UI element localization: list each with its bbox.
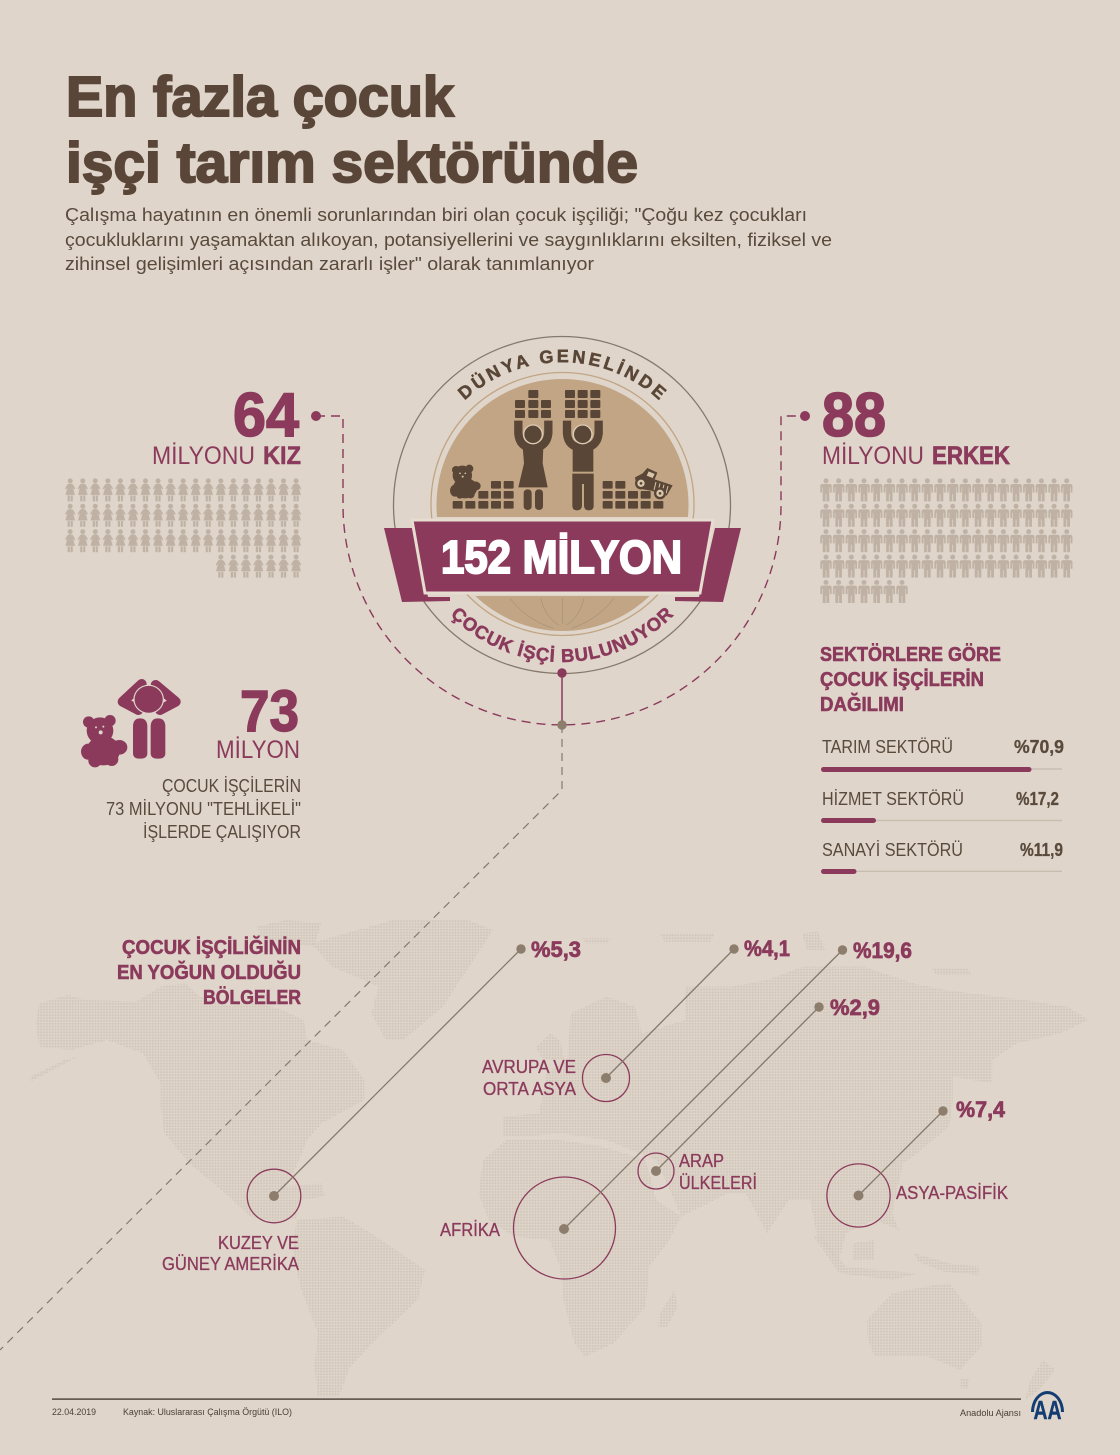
stat: hazardous work: 73 MİLYONU "TEHLİKELİ": [106, 799, 301, 819]
curved text: bottom: ÇOCUK İŞÇİ BULUNUYOR: [451, 608, 674, 665]
stat: boys: ERKEK: [932, 442, 1010, 470]
region: Arab countries: [638, 995, 880, 1193]
intro paragraph: çocukluklarını yaşamaktan alıkoyan, potansiyellerini ve saygınlıklarını eksilten, fiziksel ve: [65, 229, 832, 250]
region: Europe and Central Asia: [482, 936, 790, 1102]
icon: toy truck: [635, 468, 673, 499]
region: Europe and Central Asia: %4,1: [744, 936, 790, 961]
region: Arab countries: %2,9: [830, 995, 880, 1020]
bar chart: sectors: [821, 736, 1064, 874]
bricks on girl: [515, 390, 551, 418]
region: Africa: AFRİKA: [440, 1220, 500, 1240]
icon: children carrying bricks: [450, 390, 673, 510]
connector: grey dashed line to map: [0, 725, 562, 1350]
bar chart: sectors: HİZMET SEKTÖRÜ: [822, 788, 964, 809]
footer: Anadolu Ajansı: [960, 1408, 1021, 1418]
curved text: top: DÜNYA GENELİNDE: [457, 350, 667, 400]
bricks on boy: [565, 390, 600, 418]
left brick pile: [453, 481, 514, 509]
stat: girls: KIZ: [263, 442, 301, 470]
heading: regions: ÇOCUK İŞÇİLİĞİNİN: [122, 935, 301, 959]
region: Americas: KUZEY VE: [218, 1233, 299, 1253]
heading: regions: EN YOĞUN OLDUĞU: [117, 960, 301, 984]
region: Africa: %19,6: [853, 938, 912, 963]
connector: maroon dashed arc: [316, 416, 805, 725]
pictogram: girls: [64, 478, 302, 580]
region: Americas: %5,3: [531, 937, 581, 962]
stat: boys: [800, 381, 1010, 470]
title: En fazla çocuk: [66, 65, 454, 129]
bar chart: sectors: %11,9: [1020, 839, 1063, 860]
region: Asia-Pacific: ASYA-PASİFİK: [896, 1183, 1008, 1203]
intro paragraph: zihinsel gelişimleri açısından zararlı işler" olarak tanımlanıyor: [65, 253, 594, 274]
ribbon right: [675, 528, 741, 602]
stat: boys: 88: [822, 381, 886, 450]
pictogram: boys: [820, 478, 1073, 605]
stat: girls: 64: [233, 381, 299, 450]
region: Asia-Pacific: %7,4: [956, 1097, 1006, 1122]
footer: [52, 1391, 1064, 1425]
heading: sectors: SEKTÖRLERE GÖRE: [820, 643, 1001, 666]
region: Americas: GÜNEY AMERİKA: [162, 1254, 299, 1274]
region: Africa: [440, 938, 912, 1279]
icon: teddy bear: [450, 465, 481, 499]
region: Europe and Central Asia: ORTA ASYA: [483, 1079, 576, 1099]
icon: sitting child and teddy: [81, 684, 176, 767]
stat: girls: [152, 381, 321, 470]
heading: regions: BÖLGELER: [203, 986, 301, 1009]
footer: Kaynak: Uluslararası Çalışma Örgütü (ILO): [123, 1407, 292, 1417]
banner: [412, 520, 713, 593]
heading: sectors: DAĞILIMI: [820, 692, 904, 716]
title: işçi tarım sektöründe: [66, 131, 638, 195]
bar chart: sectors: SANAYİ SEKTÖRÜ: [822, 839, 963, 860]
footer: 22.04.2019: [52, 1407, 96, 1417]
title: [66, 65, 638, 195]
heading: sectors: ÇOCUK İŞÇİLERİN: [820, 668, 984, 691]
girl figure: [518, 421, 548, 510]
ribbon left: [384, 528, 450, 602]
icon: Anadolu Agency logo: [1031, 1391, 1064, 1425]
region: Arab countries: ÜLKELERİ: [679, 1173, 757, 1193]
bar chart: sectors: %17,2: [1016, 788, 1059, 809]
stat: boys: MİLYONU: [822, 441, 924, 470]
intro paragraph: [65, 204, 832, 274]
stat: hazardous work: MİLYON: [216, 735, 300, 764]
bar chart: sectors: TARIM SEKTÖRÜ: [822, 736, 953, 757]
stat: hazardous work: İŞLERDE ÇALIŞIYOR: [143, 822, 301, 842]
central emblem: [384, 336, 741, 674]
banner value: 152 MİLYON: [441, 531, 682, 583]
region: Arab countries: ARAP: [679, 1151, 724, 1171]
globe lines: [510, 598, 614, 628]
stat: girls: MİLYONU: [152, 441, 255, 470]
connector: emblem stem: [557, 668, 567, 730]
region: Americas: [162, 937, 581, 1274]
region: Europe and Central Asia: AVRUPA VE: [482, 1057, 576, 1077]
heading: regions: [117, 935, 301, 1009]
right brick pile: [603, 481, 663, 509]
stat: hazardous work: [106, 679, 301, 842]
stat: hazardous work: ÇOCUK İŞÇİLERİN: [162, 776, 301, 796]
stat: hazardous work: 73: [240, 679, 299, 744]
icon: Anadolu Agency logo: AA: [1034, 1395, 1062, 1425]
boy figure: [567, 421, 599, 510]
bar chart: sectors: %70,9: [1014, 736, 1064, 757]
dotted world map: [30, 920, 1089, 1400]
heading: sectors: [820, 643, 1001, 716]
intro paragraph: Çalışma hayatının en önemli sorunlarından biri olan çocuk işçiliği; "Çoğu kez çocukları: [65, 204, 807, 225]
region: Asia-Pacific: [827, 1097, 1008, 1227]
